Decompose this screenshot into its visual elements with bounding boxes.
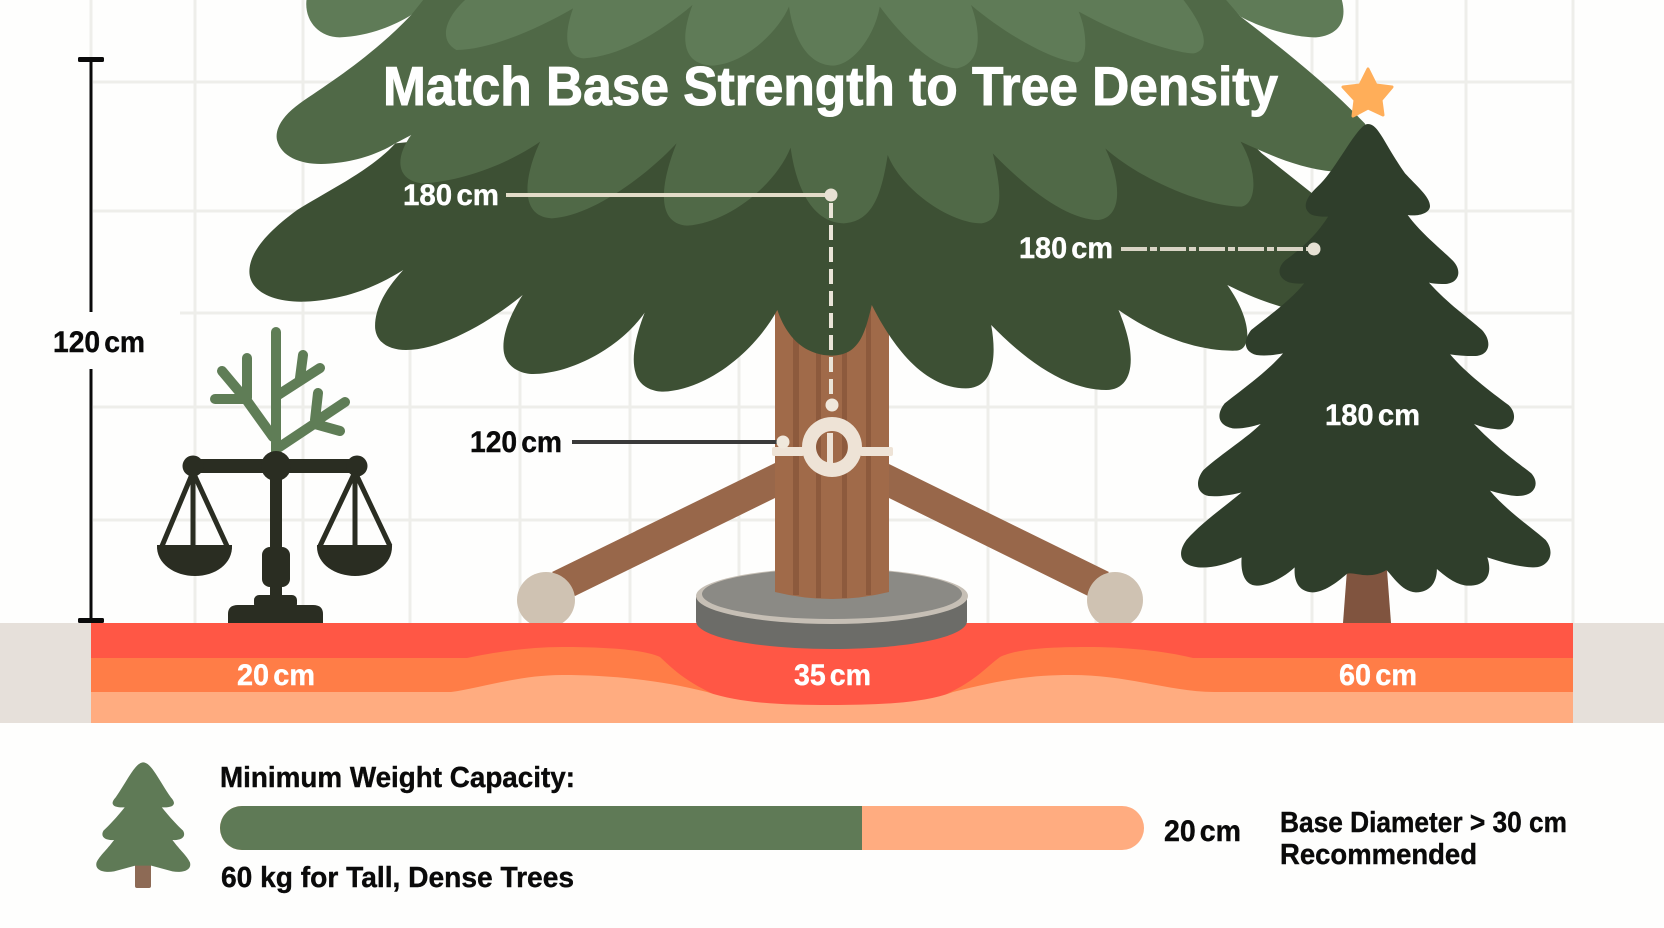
small tree foliage <box>1181 124 1551 592</box>
icon: small dark tree <box>1181 124 1551 623</box>
text block: base diameter recommendation: Recommended <box>1280 839 1477 871</box>
callout: 180 cm canopy leader <box>403 179 838 412</box>
icon: small green tree <box>96 762 190 888</box>
icon: star <box>1343 69 1392 116</box>
canopy light layer <box>306 0 1343 68</box>
callout: 180 cm small tree leader: 180 cm <box>1019 232 1113 265</box>
callout: height axis 120 cm: 120 cm <box>53 326 145 359</box>
small tree trunk <box>1343 570 1391 623</box>
label: ground 20 cm: 20 cm <box>237 659 315 692</box>
text block: base diameter recommendation <box>1280 807 1567 871</box>
text block: base diameter recommendation: Base Diameter > 30 cm <box>1280 807 1567 839</box>
callout: height axis 120 cm <box>53 57 145 623</box>
panel: stand legs and feet <box>517 463 1143 628</box>
label: ground 35 cm: 35 cm <box>794 659 871 692</box>
panel: trunk <box>775 290 889 599</box>
icon: sapling <box>215 332 345 453</box>
title: Match Base Strength to Tree Density <box>383 55 1278 117</box>
label: ground 60 cm: 60 cm <box>1339 659 1417 692</box>
label: tree 180 cm: 180 cm <box>1325 399 1420 432</box>
panel: round base plate <box>696 568 968 649</box>
label: 60 kg for tall dense trees: 60 kg for Tall, Dense Trees <box>221 862 574 894</box>
label: minimum weight capacity: Minimum Weight Capacity: <box>220 762 575 794</box>
callout: 180 cm small tree leader <box>1019 232 1320 265</box>
icon: scale <box>157 451 392 623</box>
panel: large tree canopy <box>249 0 1390 392</box>
callout: 180 cm canopy leader: 180 cm <box>403 179 499 212</box>
panel: ground layers <box>0 623 1664 723</box>
icon: clamp ring <box>772 417 893 477</box>
label: bar value 20 cm: 20 cm <box>1164 815 1241 848</box>
icon: balance scale with sapling <box>157 332 392 623</box>
bar chart: capacity bar <box>220 806 1144 850</box>
canopy middle layer <box>277 0 1390 226</box>
callout: 120 cm stand clamp: 120 cm <box>470 426 562 459</box>
canopy dark layer <box>249 100 1390 392</box>
